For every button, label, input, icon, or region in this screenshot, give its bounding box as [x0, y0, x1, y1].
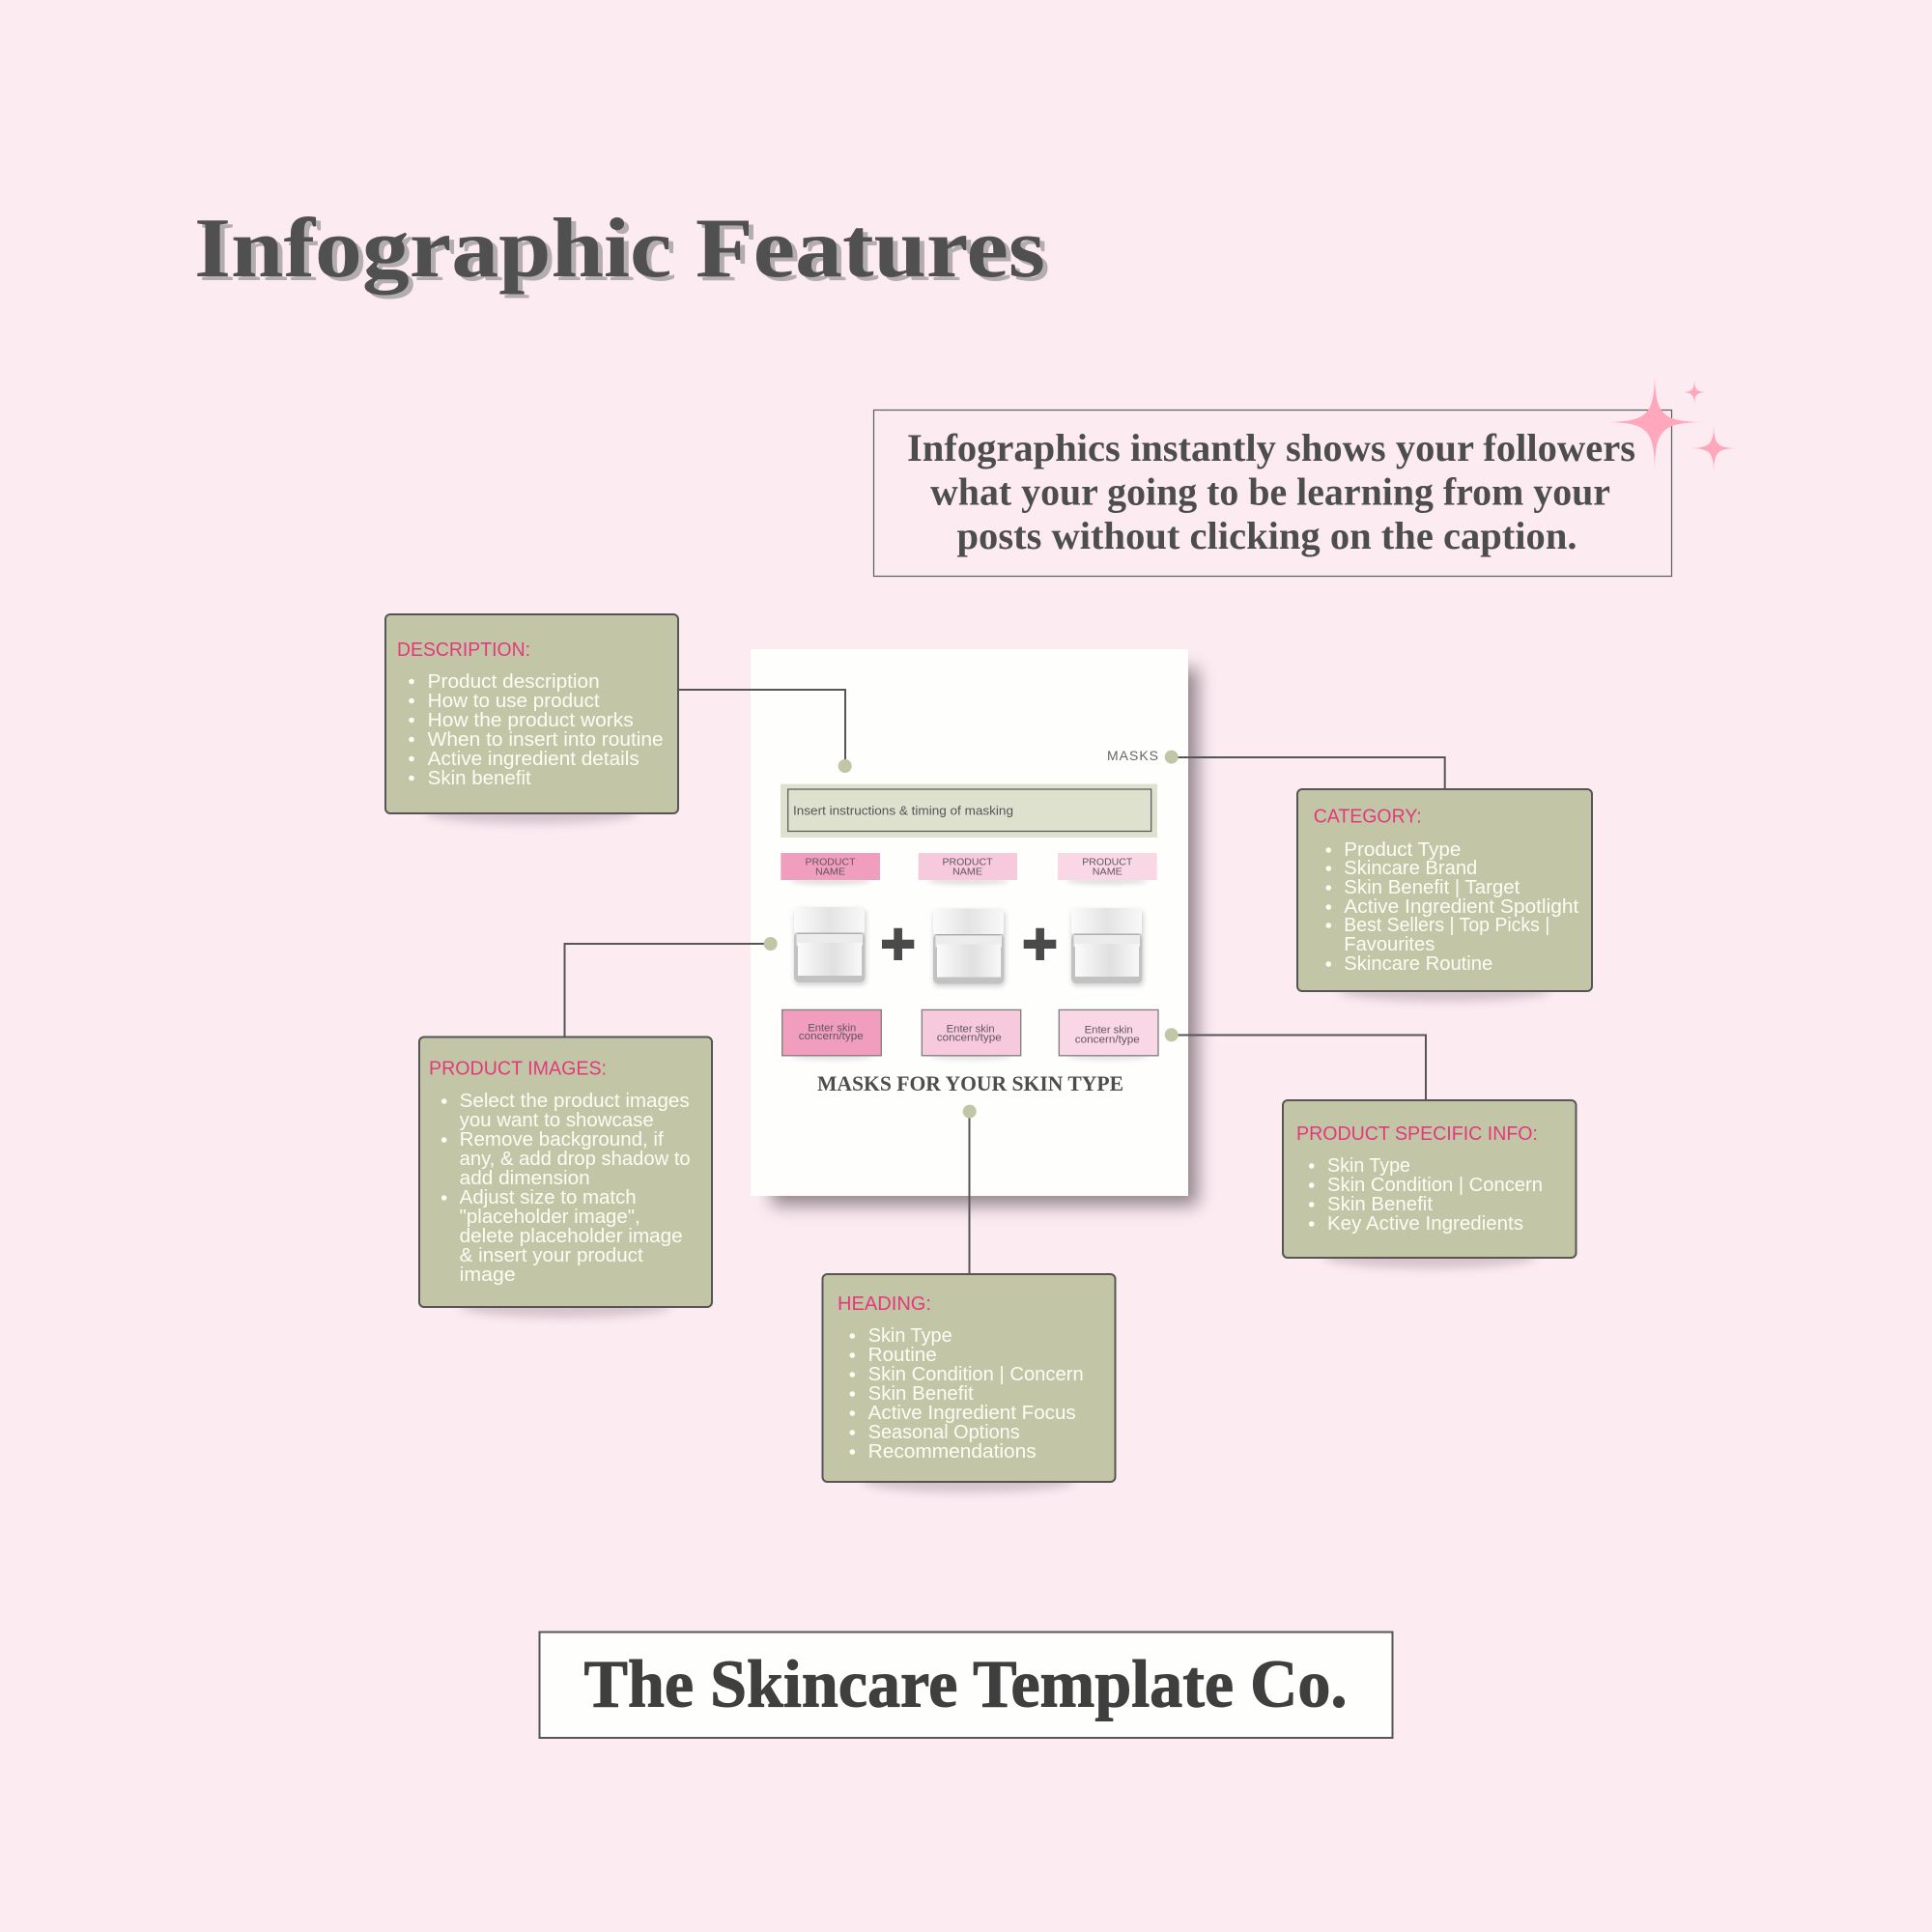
skin concern box 1: Enter skin	[808, 1023, 856, 1035]
title: Infographic Features	[194, 202, 1045, 296]
category list: Best Sellers | Top Picks |	[1344, 915, 1549, 936]
product name tag 3: PRODUCT	[1082, 856, 1133, 867]
product images list: Select the product images	[460, 1091, 690, 1112]
product specific info list: Skin Benefit	[1327, 1194, 1433, 1215]
description list: When to insert into routine	[428, 729, 664, 751]
callout: intro statement: posts without clicking on the caption.	[956, 514, 1577, 557]
arrow: category connector	[1165, 751, 1445, 789]
heading list: Skin Condition | Concern	[868, 1364, 1084, 1385]
heading list	[850, 1325, 1084, 1463]
skin concern box 2: Enter skin	[947, 1023, 995, 1035]
category label on page: MASKS	[1107, 748, 1158, 763]
icon: plus 1	[882, 928, 914, 960]
panel: product images	[419, 1037, 712, 1318]
panel: product specific info	[1283, 1100, 1577, 1268]
description list: Product description	[428, 671, 600, 693]
panel: heading: HEADING:	[838, 1293, 931, 1315]
skin concern box 3	[1059, 1009, 1158, 1061]
category list: Skin Benefit | Target	[1344, 877, 1520, 898]
product images list: you want to showcase	[460, 1110, 654, 1131]
panel: product specific info: PRODUCT SPECIFIC INFO:	[1296, 1123, 1538, 1145]
product images list: Adjust size to match	[460, 1187, 637, 1208]
product name tag 3: NAME	[1093, 866, 1122, 877]
product images list: "placeholder image",	[460, 1207, 640, 1228]
description list: How to use product	[428, 691, 600, 712]
callout: intro statement: Infographics instantly shows your followers	[907, 426, 1635, 469]
instructions banner	[781, 784, 1157, 838]
category list: Product Type	[1344, 839, 1461, 861]
heading list: Routine	[868, 1345, 937, 1366]
product specific info list: Skin Type	[1327, 1155, 1410, 1177]
panel: heading	[823, 1274, 1115, 1492]
panel: category: CATEGORY:	[1314, 807, 1422, 828]
description list: Active ingredient details	[428, 749, 639, 770]
heading list: Seasonal Options	[868, 1422, 1020, 1443]
product images list: & insert your product	[460, 1245, 643, 1266]
panel: description: DESCRIPTION:	[397, 639, 530, 661]
footer brand box	[539, 1633, 1393, 1738]
product specific info list: Key Active Ingredients	[1327, 1213, 1523, 1235]
skin concern box 1: concern/type	[799, 1031, 864, 1042]
product images list: any, & add drop shadow to	[460, 1149, 691, 1170]
product images list	[441, 1091, 691, 1286]
product name tag 3	[1058, 853, 1157, 885]
footer brand box: The Skincare Template Co.	[583, 1648, 1347, 1722]
skin concern box 1	[782, 1009, 881, 1061]
category list: Skincare Routine	[1344, 953, 1492, 975]
callout: intro statement: what your going to be learning from your	[930, 469, 1610, 514]
icon: sparkles	[1606, 374, 1738, 472]
heading list: Recommendations	[868, 1441, 1037, 1463]
product name tag 2	[919, 853, 1017, 885]
product name tag 1: PRODUCT	[806, 856, 856, 867]
panel: template page preview	[751, 649, 1198, 1206]
description list: Skin benefit	[428, 768, 531, 789]
skin concern box 2	[922, 1009, 1021, 1061]
product images list: Remove background, if	[460, 1129, 664, 1151]
description list	[409, 671, 664, 789]
instructions banner: Insert instructions & timing of masking	[793, 804, 1013, 817]
heading list: Skin Type	[868, 1325, 952, 1347]
page heading: MASKS FOR YOUR SKIN TYPE	[817, 1071, 1123, 1095]
category list: Active Ingredient Spotlight	[1344, 896, 1579, 918]
icon: jar 1	[794, 907, 867, 985]
product images list: add dimension	[460, 1168, 590, 1189]
panel: product images: PRODUCT IMAGES:	[429, 1059, 607, 1080]
icon: plus 2	[1024, 928, 1056, 960]
category list: Favourites	[1344, 934, 1435, 955]
panel: category	[1297, 789, 1592, 1002]
product images list: image	[460, 1264, 516, 1286]
icon: jar 3	[1071, 908, 1144, 986]
arrow: product images connector	[564, 937, 778, 1037]
category list: Skincare Brand	[1344, 858, 1477, 879]
arrow: description connector	[678, 690, 852, 773]
heading list: Skin Benefit	[868, 1383, 974, 1405]
product specific info list	[1309, 1155, 1543, 1235]
skin concern box 3: concern/type	[1075, 1034, 1140, 1045]
product name tag 1: NAME	[815, 866, 845, 877]
skin concern box 3: Enter skin	[1085, 1024, 1133, 1036]
icon: jar 2	[933, 908, 1006, 987]
product images list: delete placeholder image	[460, 1226, 683, 1247]
category list	[1325, 839, 1579, 975]
callout: intro statement	[873, 410, 1671, 576]
skin concern box 2: concern/type	[937, 1032, 1002, 1043]
product name tag 1	[781, 853, 880, 885]
panel: description	[385, 614, 678, 824]
description list: How the product works	[428, 710, 634, 731]
arrow: product specific info connector	[1165, 1028, 1426, 1100]
heading list: Active Ingredient Focus	[868, 1403, 1076, 1424]
title: Infographic Features	[199, 206, 1050, 299]
arrow: heading connector	[963, 1105, 977, 1274]
product name tag 2: NAME	[952, 866, 982, 877]
product specific info list: Skin Condition | Concern	[1327, 1175, 1543, 1196]
product name tag 2: PRODUCT	[943, 856, 993, 867]
